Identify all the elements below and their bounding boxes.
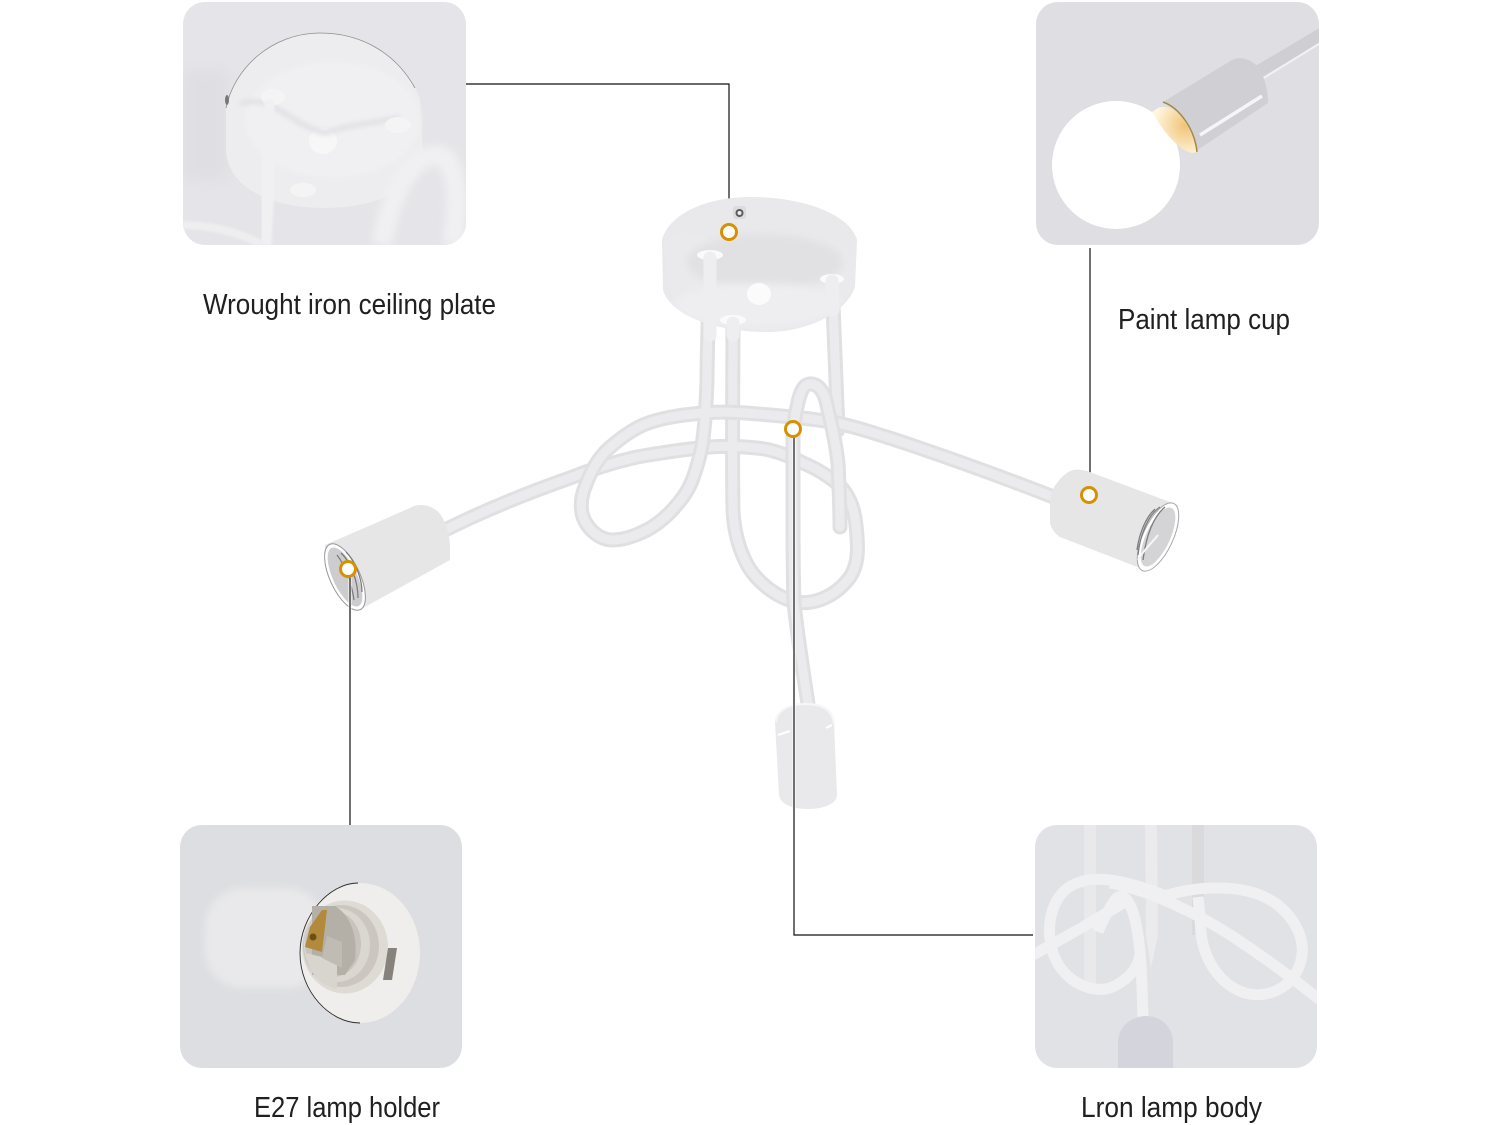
arm: left socket loop: [445, 322, 857, 603]
tube: [1258, 34, 1322, 72]
marker: ceiling plate: [722, 224, 736, 240]
left loop: [1049, 879, 1163, 989]
left socket: [316, 505, 450, 616]
marker: lamp cup: [1082, 488, 1096, 502]
panel: lamp body photo: [1033, 825, 1320, 1070]
right socket: [1050, 470, 1187, 577]
label: lamp cup: Paint lamp cup: [1118, 304, 1290, 336]
connector line: ceiling plate: [466, 84, 729, 224]
hook and pendant tube: [1098, 896, 1143, 1020]
label: lamp body: Lron lamp body: [1081, 1092, 1262, 1124]
vertical tubes: [1145, 825, 1204, 966]
lamp: central product: [316, 190, 1187, 809]
label: ceiling plate: Wrought iron ceiling plate: [203, 289, 496, 321]
panel: E27 lamp holder photo: [180, 825, 462, 1068]
marker: lamp body: [786, 422, 800, 436]
label: lamp holder: E27 lamp holder: [254, 1092, 440, 1124]
socket rim: [300, 883, 420, 1023]
bulb: [1052, 101, 1180, 229]
plate disc: [225, 33, 423, 208]
connector line: lamp cup: [1089, 248, 1091, 487]
diagonal arm: [1110, 883, 1320, 1000]
brass contact: [305, 910, 327, 952]
connector line: lamp body: [794, 437, 1033, 935]
tubes: [183, 100, 456, 245]
arm: hook and pendant tube: [793, 384, 840, 704]
arm: straight tube from plate behind hook: [832, 280, 838, 430]
cup: [1152, 58, 1268, 153]
panel: ceiling plate photo: [183, 2, 466, 245]
arm: lower bar: [1033, 902, 1125, 955]
marker: lamp holder: [340, 562, 356, 576]
connector line: lamp holder: [348, 577, 352, 825]
centre knob: [747, 283, 771, 305]
pendant socket: [775, 703, 837, 809]
holder body: [207, 890, 316, 986]
pendant socket: [1118, 1016, 1173, 1070]
screw: [733, 206, 746, 219]
panel: lamp cup photo: [1036, 2, 1322, 245]
ceiling plate: [662, 197, 857, 332]
tube stubs: [710, 258, 833, 335]
right loop: [1165, 888, 1302, 995]
knob: [309, 128, 337, 154]
arm: right socket loop: [581, 256, 1056, 540]
